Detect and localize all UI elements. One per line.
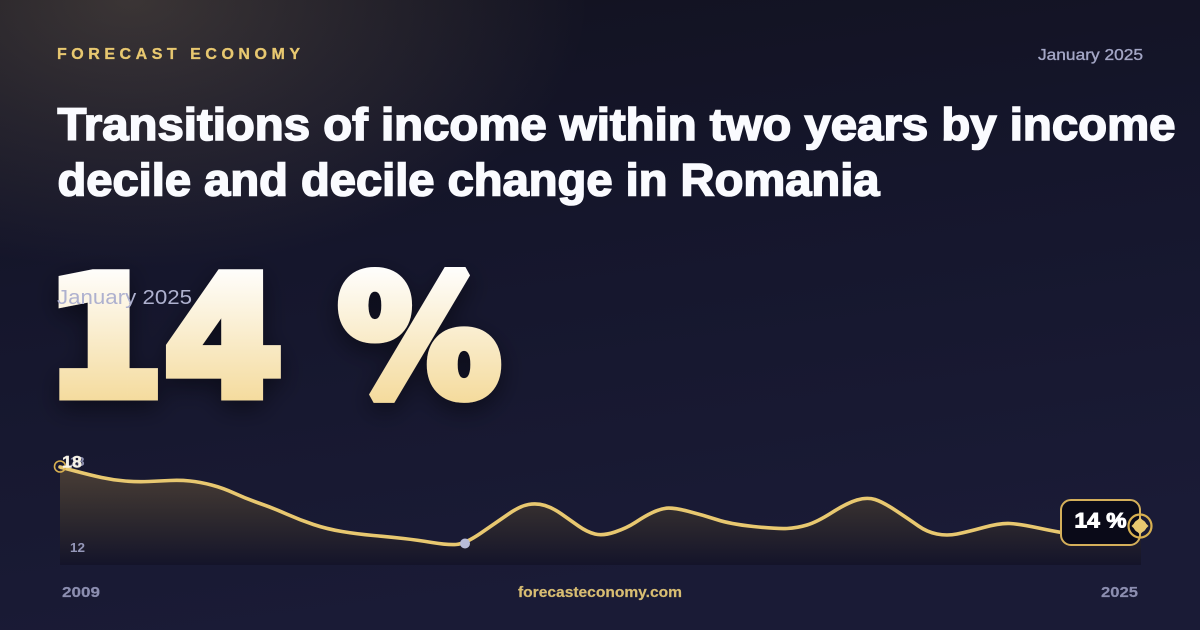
brand label: FORECAST ECONOMY [57, 46, 300, 63]
x-axis start year: 2009 [62, 585, 100, 601]
minimum marker [460, 538, 470, 548]
big number: 14 [45, 242, 283, 434]
axis label 18 highlighted: 18 [62, 452, 82, 472]
date top right: January 2025 [1038, 47, 1143, 64]
axis label 12: 12 [70, 540, 85, 555]
callout: latest value [1061, 500, 1140, 545]
title: Transitions of income within two years by income [58, 99, 1176, 150]
title [58, 99, 1176, 206]
line chart [54, 452, 1152, 565]
start marker [54, 461, 66, 472]
big number [45, 242, 501, 434]
overlaid date: January 2025 [57, 286, 192, 309]
data line [60, 467, 1085, 545]
title: decile and decile change in Romania [58, 154, 881, 206]
x-axis end year: 2025 [1101, 585, 1138, 601]
end marker [1128, 514, 1152, 538]
axis label 18 muted: 18 [70, 454, 84, 469]
area fill [60, 467, 1141, 565]
callout: latest value: 14 % [1074, 510, 1127, 532]
source website: forecasteconomy.com [518, 585, 682, 601]
big number: % [338, 242, 501, 434]
